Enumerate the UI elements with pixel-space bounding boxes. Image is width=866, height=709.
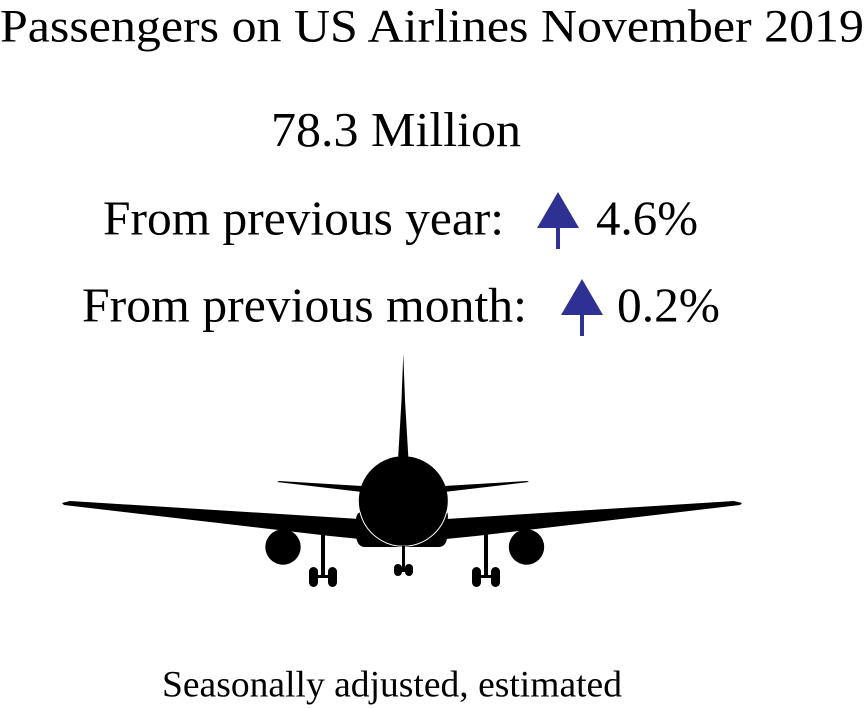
footnote: Seasonally adjusted, estimated (162, 665, 622, 706)
title: Passengers on US Airlines November 2019 (0, 1, 864, 53)
fuselage (359, 456, 448, 545)
value: year change: 4.6% (596, 190, 698, 246)
wings (62, 501, 360, 539)
right main gear (472, 533, 500, 587)
value: month change: 0.2% (617, 278, 720, 332)
headline figure: 78.3 Million (271, 102, 521, 157)
icon: up arrow month (561, 279, 603, 336)
fuselage highlight (360, 512, 447, 546)
engines (265, 529, 301, 565)
tail fin (398, 354, 408, 460)
label: from previous year: From previous year: (103, 190, 504, 246)
icon: up arrow year (537, 192, 579, 249)
nose gear (394, 546, 413, 576)
icon: airplane front view (62, 354, 742, 587)
left main gear (309, 533, 337, 587)
label: from previous month: From previous month: (82, 278, 527, 332)
horizontal stabilizers (277, 481, 362, 492)
belly (356, 512, 448, 547)
